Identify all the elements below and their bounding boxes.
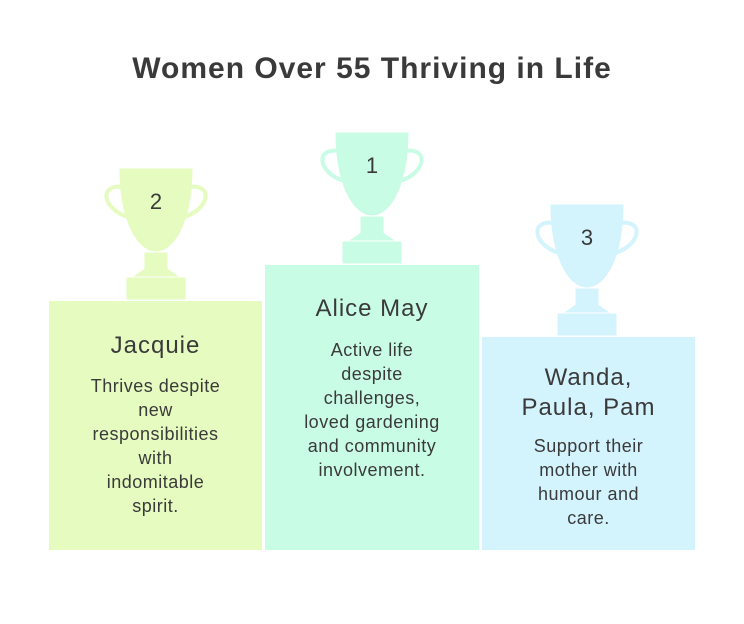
text: Jacquie: indomitable: [107, 472, 204, 492]
text: Jacquie: new: [138, 400, 173, 420]
panel: Alice May: [265, 265, 479, 550]
panel: Wanda, Paula, Pam: [482, 337, 695, 550]
text: Wanda, Paula, Pam: care.: [567, 508, 610, 528]
text: Wanda, Paula, Pam: humour and: [538, 484, 639, 504]
trophy 1: 1: [366, 153, 378, 178]
text: Jacquie: [91, 376, 220, 516]
trophy 3: 3: [581, 225, 593, 250]
name: Jacquie: Jacquie: [111, 332, 200, 359]
name: Alice May: Alice May: [315, 295, 429, 322]
text: Alice May: challenges,: [324, 388, 420, 408]
text: Alice May: loved gardening: [304, 412, 440, 432]
text: Wanda, Paula, Pam: mother with: [539, 460, 638, 480]
text: Jacquie: Thrives despite: [91, 376, 220, 396]
trophy 2: 2: [150, 189, 162, 214]
text: Alice May: despite: [341, 364, 403, 384]
text: Jacquie: spirit.: [132, 496, 179, 516]
text: Wanda, Paula, Pam: [534, 436, 643, 528]
text: Alice May: and community: [308, 436, 436, 456]
trophy 1: [322, 133, 422, 263]
text: Alice May: [304, 340, 440, 480]
text: Wanda, Paula, Pam: Support their: [534, 436, 643, 456]
name: Wanda, Paula, Pam: Paula, Pam: [521, 394, 656, 421]
text: Alice May: Active life: [331, 340, 413, 360]
text: Jacquie: with: [138, 448, 172, 468]
text: Jacquie: responsibilities: [92, 424, 219, 444]
text: Alice May: involvement.: [318, 460, 426, 480]
panel: Jacquie: [49, 301, 262, 550]
trophy 3: [537, 205, 637, 335]
title: Women Over 55 Thriving in Life: [132, 52, 612, 85]
name: Wanda, Paula, Pam: [521, 364, 656, 421]
name: Wanda, Paula, Pam: Wanda,: [545, 364, 632, 391]
trophy 2: [106, 169, 206, 299]
